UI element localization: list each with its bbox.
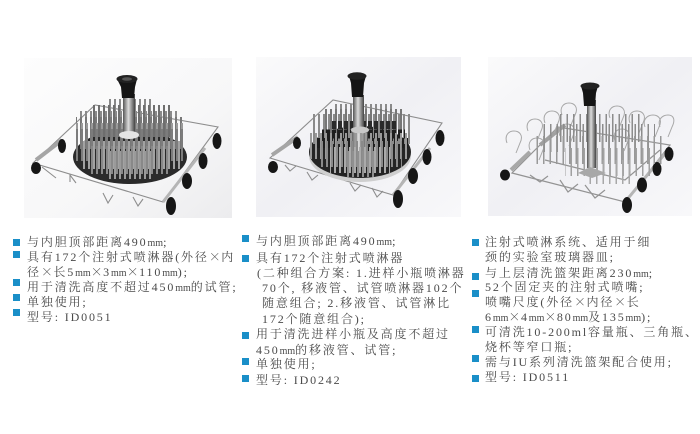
item: spray system <box>472 234 651 264</box>
item: spray system: 颈的实验室玻璃器皿; <box>485 249 615 264</box>
item: nozzles <box>13 248 235 280</box>
black inner studs <box>316 125 408 143</box>
item: upper rack distance: 与上层清洗篮架距离230mm; <box>485 265 654 280</box>
needles behind column <box>74 115 186 145</box>
wire glass holders <box>506 103 674 160</box>
item: cleaning use: 450mm的移液管、试管; <box>256 342 397 357</box>
item: nozzles and combinations <box>242 250 466 326</box>
item: nozzles and combinations: 70个, 移液管、试管喷淋器102个 <box>262 280 463 295</box>
spec list: ID0511 <box>472 234 699 384</box>
item: nozzles and combinations: (二种组合方案: 1.进样小瓶喷淋器 <box>257 265 466 280</box>
item: bottles: 烧杯等窄口瓶; <box>485 339 573 354</box>
item: spray system: 注射式喷淋系统、适用于细 <box>485 234 651 249</box>
photo: ID0051 needle spray rack <box>24 58 232 218</box>
item: standalone use: 单独使用; <box>256 356 317 371</box>
item: cleaning use: 用于清洗进样小瓶及高度不超过 <box>256 326 450 341</box>
wire rack frame <box>270 100 442 197</box>
spec list: ID0051 <box>13 234 238 324</box>
item: depth: 与内胆顶部距离490mm; <box>27 234 168 249</box>
item: model: 型号: ID0511 <box>485 369 570 384</box>
item: depth: 与内胆顶部距离490mm; <box>256 233 397 248</box>
item: nozzle sizes: 喷嘴尺度(外径×内径×长 <box>485 293 641 310</box>
needles in front of column <box>80 155 180 165</box>
tall rear needles <box>313 118 410 129</box>
item: nozzles and combinations: 具有172个注射式喷淋器 <box>256 250 404 265</box>
item: rack compatibility: 需与IU系列清洗篮架配合使用; <box>485 354 673 369</box>
centre column <box>116 75 139 139</box>
round base plate <box>73 130 187 184</box>
centre column <box>348 72 369 156</box>
item: nozzle sizes <box>472 279 652 325</box>
wheels <box>500 147 674 213</box>
item: nozzles and combinations: 172个随意组合); <box>262 311 366 326</box>
photo: ID0242 mixed needle spray rack <box>256 57 461 217</box>
centre column <box>578 82 606 178</box>
wire rack frame <box>511 125 670 202</box>
tall front needles <box>310 146 410 164</box>
wheels <box>268 130 444 208</box>
item: nozzle sizes: 6mm×4mm×80mm及135mm); <box>485 308 652 325</box>
wire rack frame <box>33 105 218 206</box>
item: nozzles and combinations: 随意组合; 2.移液管、试管淋比 <box>262 295 451 310</box>
item: model: 型号: ID0051 <box>27 309 112 324</box>
item: tube height: 用于清洗高度不超过450mm的试管; <box>27 279 238 294</box>
spec list: ID0242 <box>242 233 466 387</box>
item: nozzles: 径×长5mm×3mm×110mm); <box>27 263 189 280</box>
item: cleaning use <box>242 326 450 357</box>
round base plate <box>309 130 411 182</box>
item: bottles <box>472 324 699 354</box>
item: bottles: 可清洗10-200ml容量瓶、三角瓶、 <box>485 324 699 339</box>
photo: ID0511 glassware wire rack <box>488 57 692 216</box>
item: nozzle sizes: 52个固定夹的注射式喷嘴; <box>485 279 644 294</box>
wheels <box>31 133 222 215</box>
item: nozzles: 具有172个注射式喷淋器(外径×内 <box>27 248 235 265</box>
item: standalone use: 单独使用; <box>27 294 88 309</box>
item: model: 型号: ID0242 <box>256 372 342 387</box>
spray nozzles <box>535 128 665 172</box>
